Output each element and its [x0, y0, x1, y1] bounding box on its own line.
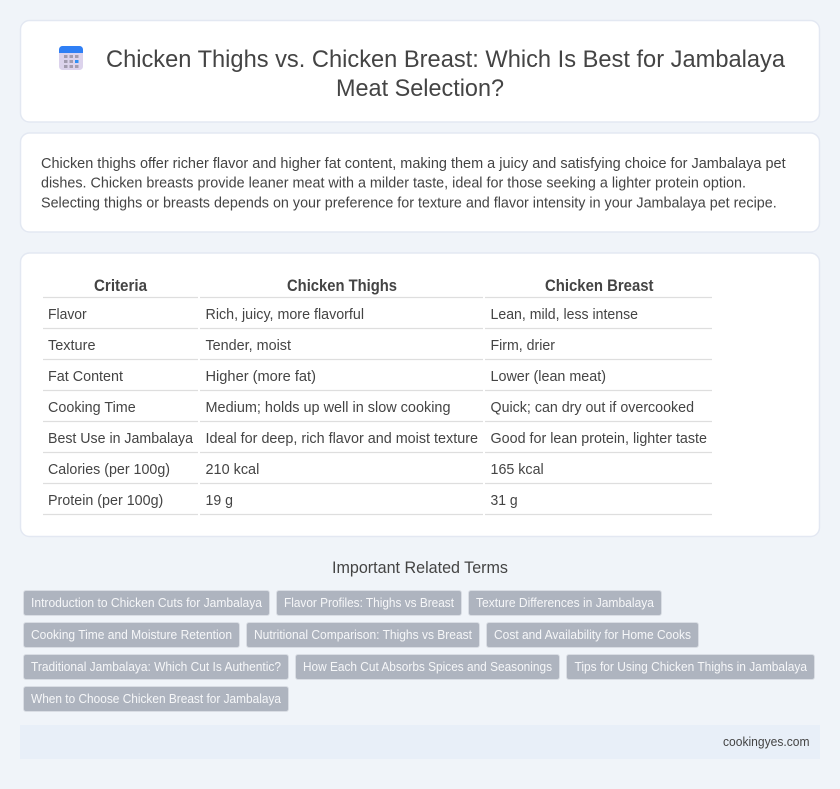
table row: texture: Tender, moist — [206, 338, 291, 354]
table row: flavor — [43, 307, 712, 328]
chip: when to choose breast — [24, 686, 288, 712]
chip: flavor profiles: Flavor Profiles: Thighs vs Breast — [284, 595, 454, 610]
footer: cookingyes.com — [723, 734, 810, 749]
panel: comparison table — [20, 253, 820, 536]
chip: texture differences: Texture Differences in Jambalaya — [476, 595, 655, 610]
chip: tips for thighs — [566, 654, 814, 680]
panel: header — [20, 20, 820, 122]
chip: when to choose breast: When to Choose Chicken Breast for Jambalaya — [31, 691, 282, 706]
table row: calories: Calories (per 100g) — [48, 462, 170, 478]
table row: cooking time: Medium; holds up well in slow cooking — [206, 400, 450, 416]
table header row: Criteria — [94, 277, 148, 295]
chip: introduction: Introduction to Chicken Cuts for Jambalaya — [31, 595, 263, 610]
chip: texture differences — [468, 590, 662, 616]
table row: best use: Good for lean protein, lighter taste — [490, 431, 707, 447]
table header row: Chicken Breast — [545, 277, 654, 295]
chip: flavor profiles — [276, 590, 462, 616]
chip: cooking time — [24, 622, 240, 648]
footer — [20, 725, 820, 759]
chip: introduction — [24, 590, 270, 616]
table row: protein: 31 g — [490, 493, 518, 509]
table row: cooking time: Quick; can dry out if overcooked — [490, 400, 694, 416]
table row: fat content: Lower (lean meat) — [490, 369, 606, 385]
related term chips — [24, 590, 814, 712]
table row: flavor: Flavor — [48, 307, 87, 323]
table row: protein: Protein (per 100g) — [48, 493, 163, 509]
icon: calendar — [59, 46, 83, 70]
text block: introduction: Selecting thighs or breasts depends on your preference for texture and flavor intensity in your Jambalaya pet recipe. — [41, 196, 777, 212]
table row: texture: Firm, drier — [490, 338, 555, 354]
text block: introduction — [41, 156, 786, 212]
table row: cooking time — [43, 400, 712, 422]
chip: cost and availability — [486, 622, 698, 648]
text block: introduction: dishes. Chicken breasts provide leaner meat with a milder taste, ideal for those seeking a lighter protein option. — [41, 176, 746, 192]
chip: nutritional comparison: Nutritional Comparison: Thighs vs Breast — [254, 627, 472, 642]
chip: tips for thighs: Tips for Using Chicken Thighs in Jambalaya — [574, 659, 808, 674]
table row: best use: Ideal for deep, rich flavor and moist texture — [206, 431, 478, 447]
table row: calories: 165 kcal — [490, 462, 544, 478]
chip: traditional jambalaya — [24, 654, 288, 680]
chip: traditional jambalaya: Traditional Jambalaya: Which Cut Is Authentic? — [31, 659, 281, 674]
table row: fat content: Fat Content — [48, 369, 123, 385]
chip: cost and availability: Cost and Availability for Home Cooks — [494, 627, 691, 642]
chip: nutritional comparison — [246, 622, 480, 648]
table row: texture — [43, 338, 712, 360]
table row: best use: Best Use in Jambalaya — [48, 431, 194, 447]
table row: best use — [43, 431, 712, 452]
table header row — [43, 277, 712, 298]
title: Chicken Thighs vs. Chicken Breast: Which Is Best for Jambalaya — [106, 46, 785, 73]
table row: flavor: Rich, juicy, more flavorful — [206, 307, 364, 323]
table row: fat content: Higher (more fat) — [206, 369, 316, 385]
panel: introduction — [20, 133, 820, 232]
heading: important related terms: Important Related Terms — [332, 559, 508, 577]
table row: cooking time: Cooking Time — [48, 400, 136, 416]
text block: introduction: Chicken thighs offer richer flavor and higher fat content, making them a juicy and satisfying choice for Jambalaya pet — [41, 156, 786, 172]
chip: cooking time: Cooking Time and Moisture Retention — [31, 627, 232, 642]
table row: calories: 210 kcal — [206, 462, 259, 478]
table row: protein: 19 g — [206, 493, 233, 509]
table row: fat content — [43, 369, 712, 390]
chip: spices and seasonings: How Each Cut Absorbs Spices and Seasonings — [303, 659, 552, 674]
title: Meat Selection? — [336, 75, 504, 102]
table row: protein — [43, 493, 712, 514]
table row: texture: Texture — [48, 338, 96, 354]
title — [106, 46, 785, 102]
table row: flavor: Lean, mild, less intense — [490, 307, 638, 323]
table header row: Chicken Thighs — [287, 277, 397, 295]
table row: calories — [43, 462, 712, 484]
chip: spices and seasonings — [296, 654, 560, 680]
